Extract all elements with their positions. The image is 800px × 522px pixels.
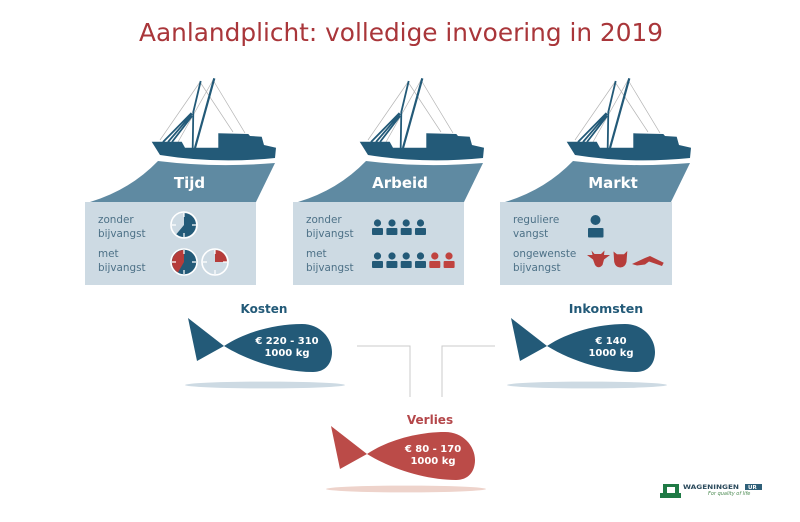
tagline: For quality of life [708, 491, 750, 497]
text: reguliere vangst: reguliere [513, 214, 559, 226]
label: Tijd: Tijd [174, 174, 205, 192]
text: zonder bijvangst: zonder [98, 214, 134, 226]
fish shape [511, 318, 655, 372]
value: loss: € 80 - 170 [405, 444, 461, 455]
icon: meat [632, 256, 664, 266]
text: met bijvangst: bijvangst [306, 262, 354, 274]
box: Tijd [85, 202, 256, 285]
icon: clock met bijvangst total [171, 249, 197, 275]
text: met bijvangst: met [98, 248, 119, 260]
badge text: UR [748, 485, 757, 491]
logo badge [745, 484, 762, 490]
logo text: WAGENINGEN [683, 484, 739, 491]
fish: Verlies [326, 413, 486, 492]
panel: Arbeid [293, 78, 484, 285]
icon: workers zonder bijvangst [372, 219, 426, 235]
text: ongewenste bijvangst: ongewenste [513, 248, 576, 260]
shadow [185, 382, 345, 388]
icon: clock zonder bijvangst [171, 212, 197, 238]
header band: Markt [505, 161, 690, 202]
fish: Kosten [185, 302, 345, 388]
connector: kosten to verlies [357, 346, 410, 397]
value: costs: 1000 kg [264, 348, 310, 359]
header band: Tijd [90, 161, 275, 202]
icon: fishing boat [360, 78, 484, 160]
value: costs: € 220 - 310 [255, 336, 319, 347]
heading: Inkomsten: Inkomsten [569, 301, 643, 316]
box: Arbeid [293, 202, 464, 285]
header band: Arbeid [298, 161, 483, 202]
text: zonder bijvangst: zonder [306, 214, 342, 226]
icon: fishing boat [152, 78, 276, 160]
value: loss: 1000 kg [410, 456, 456, 467]
icon: fishing boat [567, 78, 691, 160]
icon: workers met bijvangst [372, 252, 455, 268]
icon: logo mark [660, 484, 681, 498]
label: Arbeid: Arbeid [372, 174, 428, 192]
text: ongewenste bijvangst: bijvangst [513, 262, 561, 274]
panel: Tijd [85, 78, 276, 285]
text: met bijvangst: bijvangst [98, 262, 146, 274]
fish shape [188, 318, 332, 372]
heading: Verlies: Verlies [407, 413, 453, 427]
text: met bijvangst: met [306, 248, 327, 260]
icon: clock met bijvangst extra [202, 249, 228, 275]
connector: inkomsten to verlies [442, 346, 495, 397]
value: income: € 140 [595, 336, 627, 347]
fish shape [331, 426, 475, 480]
logo: Wageningen UR [660, 484, 762, 498]
icon: cow [587, 250, 610, 267]
fish: Inkomsten [507, 301, 667, 388]
text: zonder bijvangst: bijvangst [98, 228, 146, 240]
icon: pig [614, 251, 627, 268]
text: zonder bijvangst: bijvangst [306, 228, 354, 240]
shadow [507, 382, 667, 388]
panel: Markt [500, 78, 691, 285]
value: income: 1000 kg [588, 348, 634, 359]
label: Markt: Markt [588, 174, 638, 192]
box: Markt [500, 202, 672, 285]
icon: person [588, 215, 604, 238]
shadow [326, 486, 486, 492]
heading: Kosten: Kosten [241, 302, 287, 316]
title: Aanlandplicht: volledige invoering in 2019 [139, 18, 663, 47]
text: reguliere vangst: vangst [513, 228, 548, 240]
